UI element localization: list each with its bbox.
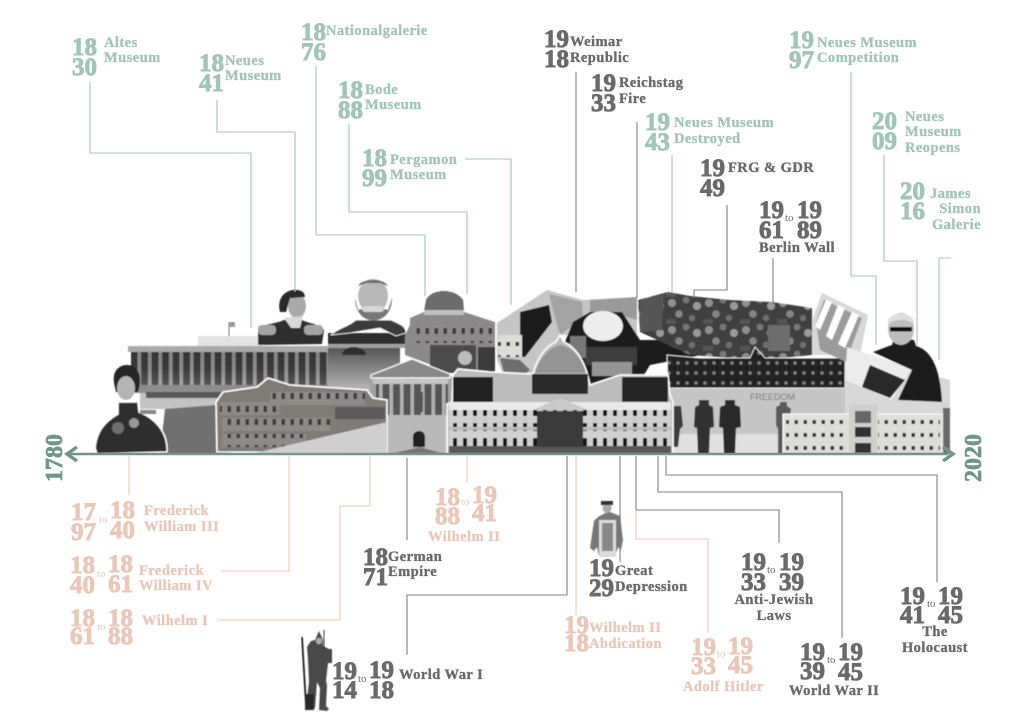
event: FRG and GDR 1949: 19	[700, 155, 725, 182]
event: Berlin Wall 1961 to 1989: to	[785, 212, 794, 224]
event: Wilhelm II 1888 to 1941	[428, 482, 500, 545]
event: Wilhelm I 1861 to 1888: 88	[108, 623, 133, 650]
event: Frederick William IV 1840 to 1861: 18	[70, 552, 95, 579]
event: Neues Museum 1841: 41	[199, 70, 224, 97]
event: Bode Museum 1888: Museum	[365, 97, 422, 113]
event: German Empire 1871: 71	[363, 564, 388, 591]
event: Wilhelm II Abdication 1918: Wilhelm II	[589, 620, 661, 636]
event: FRG and GDR 1949	[700, 155, 814, 202]
event: Neues Museum Reopens 2009	[872, 108, 962, 156]
event: Nationalgalerie 1876: 18	[301, 19, 326, 46]
event: Neues Museum Reopens 2009: 20	[872, 108, 897, 135]
event: Adolf Hitler 1933 to 1945: 45	[728, 652, 753, 679]
event: FRG and GDR 1949: FRG & GDR	[728, 160, 814, 176]
portrait: Frederick William III	[95, 365, 167, 454]
event: Great Depression 1929: 29	[589, 575, 614, 602]
event: Great Depression 1929: 19	[589, 555, 614, 582]
event: Neues Museum Destroyed 1943: Destroyed	[674, 131, 741, 147]
event: World War I 1914 to 1918: to	[358, 673, 367, 685]
event: Reichstag Fire 1933: 33	[591, 90, 616, 117]
event: World War I 1914 to 1918: World War I	[399, 667, 483, 683]
figure: soldier left	[694, 400, 714, 454]
event: Neues Museum Reopens 2009: Reopens	[905, 140, 961, 156]
arrowhead right	[943, 447, 953, 461]
event: German Empire 1871	[363, 544, 442, 591]
event: Berlin Wall 1961 to 1989	[759, 197, 835, 256]
event: Anti-Jewish Laws 1933 to 1939: Anti-Jewish	[734, 592, 814, 608]
event: Frederick William III 1797 to 1840: 97	[71, 519, 96, 546]
event: James Simon Galerie 2016: Simon	[939, 201, 981, 217]
event: Pergamon Museum 1899: Museum	[390, 167, 447, 183]
connectors: pink ruler lines	[129, 456, 708, 633]
event: Frederick William III 1797 to 1840	[71, 497, 219, 546]
event: James Simon Galerie 2016: Galerie	[932, 217, 981, 233]
event: Bode Museum 1888: Bode	[365, 82, 398, 98]
figure: soldier right	[776, 402, 791, 454]
event: Adolf Hitler 1933 to 1945: to	[717, 648, 726, 660]
event: Pergamon Museum 1899	[362, 145, 457, 192]
event: Neues Museum Competition 1997: Neues Museum	[817, 35, 917, 51]
photo: Neues Museum competition model	[812, 293, 950, 454]
event: Wilhelm II 1888 to 1941: Wilhelm II	[428, 529, 500, 545]
event: James Simon Galerie 2016	[900, 178, 981, 233]
event: Adolf Hitler 1933 to 1945: 19	[728, 633, 753, 660]
event: James Simon Galerie 2016: James	[930, 186, 971, 202]
event: Neues Museum Destroyed 1943	[645, 109, 774, 156]
event: Pergamon Museum 1899: 18	[362, 145, 387, 172]
event: World War II 1939 to 1945: 19	[838, 639, 863, 666]
event: James Simon Galerie 2016: 16	[900, 198, 925, 225]
event: Reichstag Fire 1933: Reichstag	[619, 75, 684, 91]
event: Wilhelm I 1861 to 1888: Wilhelm I	[142, 613, 208, 629]
figure: soldier centre	[719, 400, 741, 454]
photo: Bode Museum	[405, 291, 495, 373]
event: Wilhelm II Abdication 1918: Abdication	[589, 636, 662, 652]
event: Altes Museum 1830: 18	[72, 34, 97, 61]
photo: Berlin Wall with soldiers	[667, 347, 848, 454]
event: Pergamon Museum 1899: 99	[362, 165, 387, 192]
event: Neues Museum 1841: Neues	[225, 53, 264, 69]
event: Reichstag Fire 1933: Fire	[619, 91, 646, 107]
event: German Empire 1871: 18	[363, 544, 388, 571]
event: Neues Museum Destroyed 1943: 43	[645, 129, 670, 156]
event: Neues Museum Reopens 2009: Museum	[905, 124, 962, 140]
event: World War II 1939 to 1945	[789, 639, 879, 699]
event: Frederick William IV 1840 to 1861: to	[97, 568, 106, 580]
event: Wilhelm I 1861 to 1888: to	[97, 621, 106, 633]
event: Wilhelm I 1861 to 1888: 18	[108, 605, 133, 632]
event: Wilhelm II Abdication 1918	[564, 612, 662, 657]
event: Altes Museum 1830: 30	[72, 54, 97, 81]
photo: Spree river and bridge	[328, 333, 412, 395]
event: Nationalgalerie 1876: 76	[301, 39, 326, 66]
figure: soldier far left	[673, 406, 683, 447]
connector lines	[90, 66, 951, 655]
event: Neues Museum 1841: 18	[199, 50, 224, 77]
event: Frederick William IV 1840 to 1861: 40	[70, 572, 95, 599]
event: Frederick William III 1797 to 1840: 17	[71, 499, 96, 526]
portrait: David Chipperfield	[873, 313, 942, 402]
event: World War I 1914 to 1918: 19	[369, 657, 394, 684]
event: Bode Museum 1888: 18	[338, 77, 363, 104]
event: Neues Museum 1841	[199, 50, 282, 97]
photo: Nationalgalerie	[370, 359, 452, 454]
event: Weimar Republic 1918	[544, 26, 629, 73]
event: Altes Museum 1830: Altes	[104, 35, 138, 51]
event: World War I 1914 to 1918: 19	[332, 658, 357, 685]
event: Neues Museum Destroyed 1943: Neues Museum	[674, 115, 774, 131]
event: Wilhelm I 1861 to 1888	[70, 605, 208, 650]
event: Anti-Jewish Laws 1933 to 1939: 19	[741, 549, 766, 576]
event: James Simon Galerie 2016: 20	[900, 178, 925, 205]
event: Anti-Jewish Laws 1933 to 1939: Laws	[757, 608, 791, 624]
event: Neues Museum Competition 1997: 97	[789, 47, 814, 74]
event: Neues Museum 1841: Museum	[225, 68, 282, 84]
event: Anti-Jewish Laws 1933 to 1939: 33	[741, 569, 766, 596]
event: Nationalgalerie 1876	[301, 19, 428, 66]
collage of historic photographs	[95, 279, 950, 454]
arrowhead left	[67, 447, 77, 461]
connectors: dark history lines	[407, 72, 937, 655]
photo: State Opera building	[216, 378, 387, 453]
event: Anti-Jewish Laws 1933 to 1939: 19	[779, 549, 804, 576]
event: Great Depression 1929: Great	[615, 563, 653, 579]
event: German Empire 1871: Empire	[388, 564, 437, 580]
event: Wilhelm II 1888 to 1941: 18	[435, 484, 460, 511]
event: The Holocaust 1941 to 1945: 19	[938, 583, 963, 610]
event: Neues Museum Competition 1997: 19	[789, 27, 814, 54]
event: Great Depression 1929	[589, 555, 688, 602]
photo: Pergamon Museum	[497, 290, 637, 390]
event: Frederick William III 1797 to 1840: 18	[110, 497, 135, 524]
icon: WWI soldier	[302, 630, 332, 711]
event: World War I 1914 to 1918: 18	[369, 677, 394, 704]
event: Berlin Wall 1961 to 1989: 19	[797, 197, 822, 224]
event: Nationalgalerie 1876: Nationalgalerie	[326, 23, 428, 39]
event: World War II 1939 to 1945: World War II	[789, 683, 879, 699]
event: Wilhelm II Abdication 1918: 18	[564, 630, 589, 657]
event: Frederick William IV 1840 to 1861: Frederick	[139, 563, 204, 579]
event: Neues Museum Reopens 2009: 09	[872, 128, 897, 155]
event: Adolf Hitler 1933 to 1945	[683, 633, 764, 695]
event: The Holocaust 1941 to 1945	[900, 583, 968, 656]
event: Bode Museum 1888	[338, 77, 422, 124]
event: Frederick William IV 1840 to 1861: William IV	[139, 578, 213, 594]
event: The Holocaust 1941 to 1945: 45	[938, 602, 963, 629]
end year: 2020	[961, 434, 987, 482]
event: Weimar Republic 1918: 19	[544, 26, 569, 53]
event: Anti-Jewish Laws 1933 to 1939: 39	[779, 569, 804, 596]
timeline axis 1780 to 2020	[42, 434, 987, 482]
photo: Reichstag building	[447, 335, 673, 454]
event: Neues Museum Competition 1997	[789, 27, 917, 74]
event: Wilhelm II 1888 to 1941: 19	[472, 482, 497, 509]
event: Berlin Wall 1961 to 1989: 19	[759, 197, 784, 224]
event: World War II 1939 to 1945: 39	[800, 658, 825, 685]
event: Adolf Hitler 1933 to 1945: 33	[691, 653, 716, 680]
event: Adolf Hitler 1933 to 1945: 19	[691, 634, 716, 661]
icon: Great Depression man with sign	[590, 501, 623, 557]
event: Frederick William III 1797 to 1840: William III	[144, 519, 219, 535]
event: The Holocaust 1941 to 1945: The	[922, 624, 948, 640]
connectors: green museum lines	[90, 66, 951, 360]
event: Frederick William III 1797 to 1840: to	[99, 514, 108, 526]
event: World War II 1939 to 1945: 45	[838, 659, 863, 686]
event: Frederick William III 1797 to 1840: Frederick	[144, 503, 209, 519]
event: Neues Museum Reopens 2009: Neues	[905, 109, 944, 125]
event: Wilhelm I 1861 to 1888: 61	[70, 623, 95, 650]
event: Frederick William IV 1840 to 1861: 61	[108, 571, 133, 598]
portrait: Wilhelm I	[331, 279, 406, 336]
event: World War II 1939 to 1945: to	[827, 654, 836, 666]
event: Reichstag Fire 1933: 19	[591, 70, 616, 97]
event: Frederick William III 1797 to 1840: 40	[110, 517, 135, 544]
event: The Holocaust 1941 to 1945: Holocaust	[902, 640, 968, 656]
event: Frederick William IV 1840 to 1861	[70, 551, 213, 599]
event: Weimar Republic 1918: 18	[544, 46, 569, 73]
event: Weimar Republic 1918: Republic	[570, 50, 629, 66]
event: Berlin Wall 1961 to 1989: 89	[797, 217, 822, 244]
photo: Altes Museum	[128, 322, 328, 454]
event: Altes Museum 1830: Museum	[104, 50, 161, 66]
event: Wilhelm II 1888 to 1941: 88	[435, 503, 460, 530]
photo: concentration camp prisoners	[638, 292, 812, 360]
text: FREEDOM graffiti: FREEDOM	[750, 392, 795, 402]
event: Altes Museum 1830	[72, 34, 161, 81]
event: World War I 1914 to 1918	[332, 657, 483, 704]
event: Weimar Republic 1918: Weimar	[570, 34, 623, 50]
event: The Holocaust 1941 to 1945: to	[927, 598, 936, 610]
event: Wilhelm II 1888 to 1941: 41	[472, 500, 497, 527]
event: Neues Museum Destroyed 1943: 19	[645, 109, 670, 136]
event: Wilhelm II 1888 to 1941: to	[461, 496, 470, 508]
event: Reichstag Fire 1933	[591, 70, 684, 117]
portrait: Frederick William IV	[258, 290, 324, 345]
event: Anti-Jewish Laws 1933 to 1939: to	[767, 564, 776, 576]
event: Wilhelm II Abdication 1918: 19	[564, 612, 589, 639]
event: Neues Museum Competition 1997: Competition	[817, 50, 899, 66]
event: The Holocaust 1941 to 1945: 41	[900, 602, 925, 629]
event: The Holocaust 1941 to 1945: 19	[900, 583, 925, 610]
photo: Reichstag fire	[565, 311, 697, 392]
event: Adolf Hitler 1933 to 1945: Adolf Hitler	[683, 679, 764, 695]
event: Great Depression 1929: Depression	[615, 579, 688, 595]
event: Bode Museum 1888: 88	[338, 97, 363, 124]
event: Berlin Wall 1961 to 1989: Berlin Wall	[759, 240, 835, 256]
photo: James Simon Galerie and Neues Museum facade	[783, 405, 950, 454]
event: Wilhelm I 1861 to 1888: 18	[70, 605, 95, 632]
event: Pergamon Museum 1899: Pergamon	[390, 152, 457, 168]
event: FRG and GDR 1949: 49	[700, 175, 725, 202]
event: World War II 1939 to 1945: 19	[800, 639, 825, 666]
event: Anti-Jewish Laws 1933 to 1939	[734, 549, 814, 624]
start year: 1780	[42, 434, 68, 482]
event: Frederick William IV 1840 to 1861: 18	[108, 551, 133, 578]
event: Berlin Wall 1961 to 1989: 61	[759, 217, 784, 244]
event: World War I 1914 to 1918: 14	[332, 677, 358, 704]
event: German Empire 1871: German	[388, 549, 442, 565]
